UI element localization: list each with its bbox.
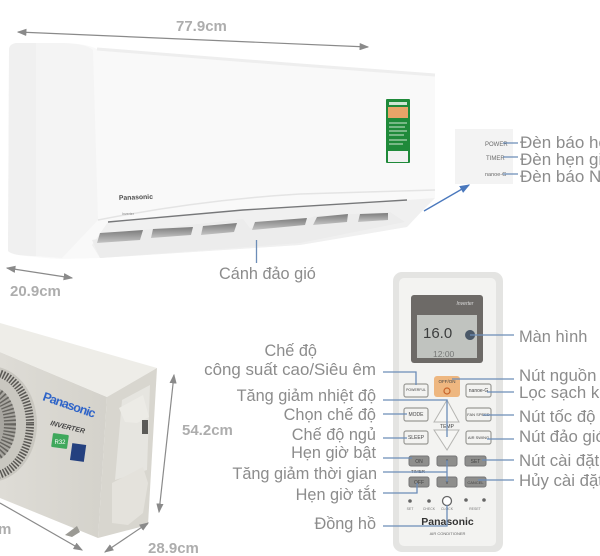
Panasonic logo: Panasonic [119,194,153,202]
right remote labels [519,328,600,490]
outdoor unit [0,323,157,538]
left remote labels: Chế độ ngủ [292,426,376,444]
left remote labels: Hẹn giờ bật [291,444,376,462]
timer up button: ^ [446,459,449,465]
label: louver: Cánh đảo gió [219,265,316,283]
louver assembly [92,198,435,258]
timer down button [437,477,457,487]
remote display: Inverter [457,301,474,307]
timer down button: v [446,480,449,486]
left remote labels: Đồng hồ [314,515,376,533]
cancel button: CANCEL [467,480,484,485]
remote control: TIMER [411,469,426,474]
air swing button: AIR SWING [468,435,489,440]
right remote leader lines [452,335,514,480]
remote display: 12:00 [433,349,455,359]
LED panel callout arrow [424,185,469,211]
reset row: SET [407,507,414,511]
remote display: 16.0 [423,325,452,342]
fan grille [0,366,37,482]
R32 badge: R32 [54,440,66,446]
left remote labels: Tăng giảm nhiệt độ [237,387,376,405]
fan speed button [466,408,491,421]
set button: SET [471,459,480,465]
reset row [407,496,486,511]
dimension: outdoor depth 28.9cm [105,523,199,556]
reset row: RESET [469,507,482,511]
fan speed button: FAN SPEED [467,412,490,417]
outdoor Panasonic logo: Panasonic [41,390,98,421]
timer off button [409,477,429,487]
sleep button [404,431,428,444]
LED indicator panel: TIMER [486,156,505,162]
LED labels [520,133,600,186]
timer up button [437,456,457,466]
nanoe button [466,384,491,397]
dimension: outdoor width [0,503,82,550]
nanoe button: nanoe-G [469,388,488,394]
on/off button: OFF/ON [438,379,456,384]
inverter badge: INVERTER [50,420,85,435]
remote caption: AIR CONDITIONER [430,531,466,536]
remote control [393,272,503,552]
LED indicator panel: POWER [485,142,508,148]
indoor air conditioner unit [8,43,435,259]
R32 badge [51,433,69,449]
left remote labels [204,342,377,533]
cancel button [465,477,486,487]
reset row: CHECK [423,507,436,511]
on/off button [434,376,460,397]
mode button: MODE [408,412,424,418]
dimension: outdoor height 54.2cm [159,375,233,512]
right remote labels: Màn hình [519,328,587,346]
right remote labels: Nút cài đặt [519,451,600,470]
dimension: indoor width 77.9cm: 77.9cm [176,18,227,35]
indoor air conditioner unit: Inverter [122,212,135,216]
timer on button [409,456,429,466]
timer on button: ON [415,459,423,465]
dimension: indoor depth 20.9cm: 20.9cm [10,283,61,300]
left remote labels: công suất cao/Siêu êm [204,360,376,379]
sleep button: SLEEP [408,435,425,441]
left remote labels: Chế độ [264,342,317,360]
energy label [386,99,410,163]
left remote leader lines [383,372,447,526]
dimension: indoor width 77.9cm [18,18,368,47]
remote display [411,295,483,363]
dimension: outdoor height 54.2cm: 54.2cm [182,422,233,439]
label: louver [219,240,316,283]
LED indicator panel [455,129,518,184]
blue badge [70,443,86,462]
right remote labels: Nút nguồn [519,366,596,385]
timer off button: OFF [414,480,424,486]
remote brand: Panasonic [421,516,474,528]
air swing button [466,431,491,444]
temperature buttons: TEMP [440,424,455,430]
dimension: indoor depth 20.9cm [7,268,72,300]
powerful button: POWERFUL [406,388,426,392]
left remote labels: Tăng giảm thời gian [232,465,377,483]
mode button [404,408,428,421]
reset row: CLOCK [441,507,454,511]
left remote labels: Hẹn giờ tắt [296,485,376,504]
temperature buttons [434,400,459,450]
left remote labels: Chọn chế độ [284,406,376,424]
set button [465,456,486,466]
powerful button [404,384,428,397]
LED indicator panel: nanoe-G [485,172,506,178]
